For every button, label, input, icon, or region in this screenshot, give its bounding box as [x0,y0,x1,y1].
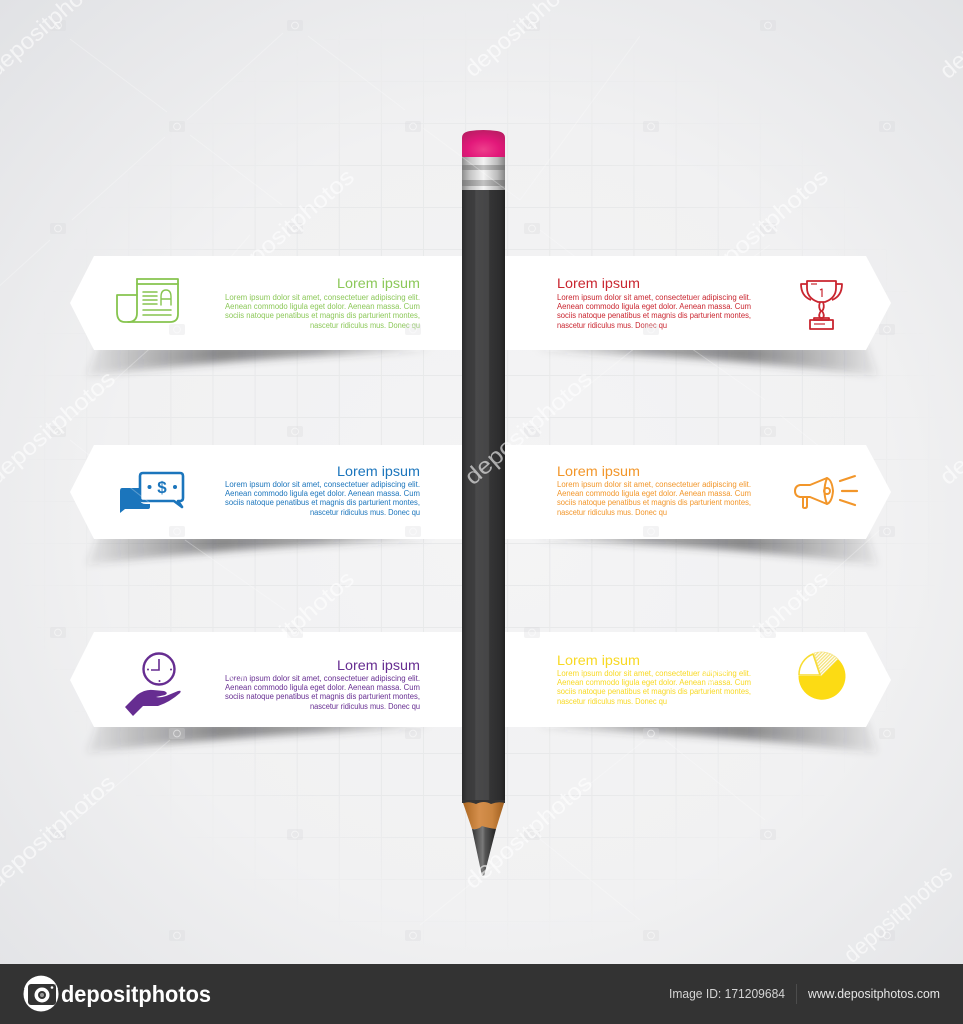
eraser [462,130,505,158]
text block: nascetur ridiculus mus. Donec qu [310,702,420,711]
icon: trophy [801,281,842,329]
watermark text: depositphotos [459,365,597,490]
heading: Lorem ipsum [337,658,420,673]
footer bar [0,964,963,1024]
text block: sociis natoque penatibus et magnis dis parturient montes, [225,498,420,507]
text block: nascetur ridiculus mus. Donec qu [557,697,667,706]
text block [557,293,751,330]
text block: Lorem ipsum dolor sit amet, consectetuer adipiscing elit. [225,674,420,683]
heading: Lorem ipsum [557,653,640,668]
panel: bottom right banner [505,632,891,727]
pencil [462,130,505,876]
panel: middle right banner [505,445,891,539]
watermark text: depositphotos [695,565,833,690]
watermark network lines [0,33,880,925]
text block [225,674,420,711]
text block: Aenean commodo ligula eget dolor. Aenean massa. Cum [557,678,751,687]
text block: nascetur ridiculus mus. Donec qu [310,321,420,330]
panel: top left banner [70,256,462,350]
icon: newspaper document [117,279,178,322]
metal ferrule [462,157,505,190]
text block: Aenean commodo ligula eget dolor. Aenean massa. Cum [557,489,751,498]
heading: Lorem ipsum [337,464,420,479]
watermark cameras [50,20,895,941]
panel: top right banner [505,256,891,350]
watermark text: depositphotos [695,163,833,288]
text block: Lorem ipsum dolor sit amet, consectetuer adipiscing elit. [225,293,420,302]
watermark text: depositphotos [221,163,359,288]
text block: Lorem ipsum dolor sit amet, consectetuer adipiscing elit. [557,480,751,489]
logo wordmark: depositphotos [61,981,211,1007]
text block [225,480,420,517]
image id: Image ID: 171209684 [669,987,785,1001]
panel: middle left banner [70,445,462,539]
text block [225,293,420,330]
wood cone [462,800,505,829]
graphite tip [472,826,496,876]
icon: pie chart [798,652,845,700]
text block: sociis natoque penatibus et magnis dis parturient montes, [225,692,420,701]
text block: sociis natoque penatibus et magnis dis parturient montes, [557,687,751,696]
text block: nascetur ridiculus mus. Donec qu [557,508,667,517]
text block: Aenean commodo ligula eget dolor. Aenean massa. Cum [225,683,420,692]
text block [557,480,751,517]
heading: Lorem ipsum [337,276,420,291]
logo camera mark [24,976,58,1012]
panel: bottom left banner [70,632,462,727]
text block: Lorem ipsum dolor sit amet, consectetuer adipiscing elit. [557,293,751,302]
watermark text: depositphotos [221,565,359,690]
heading: Lorem ipsum [557,276,640,291]
text block: sociis natoque penatibus et magnis dis parturient montes, [557,311,751,320]
watermark text: depositphotos [838,860,957,968]
text block: sociis natoque penatibus et magnis dis parturient montes, [225,311,420,320]
text block: Lorem ipsum dolor sit amet, consectetuer adipiscing elit. [225,480,420,489]
text block: Aenean commodo ligula eget dolor. Aenean massa. Cum [225,489,420,498]
scalloped body edge [462,800,505,804]
text block: nascetur ridiculus mus. Donec qu [557,321,667,330]
icon: money chat bubbles [120,473,183,513]
icon: money chat bubbles: $ [157,478,167,497]
text block: sociis natoque penatibus et magnis dis parturient montes, [557,498,751,507]
banner shadows [86,344,878,753]
icon: megaphone [795,476,857,508]
website url: www.depositphotos.com [807,987,940,1001]
icon: clock over hand [125,654,181,716]
watermark text: depositphotos [459,769,597,894]
heading: Lorem ipsum [557,464,640,479]
text block: Aenean commodo ligula eget dolor. Aenean massa. Cum [225,302,420,311]
text block: Lorem ipsum dolor sit amet, consectetuer adipiscing elit. [557,669,751,678]
text block [557,669,751,706]
pencil body [462,190,505,803]
text block: Aenean commodo ligula eget dolor. Aenean massa. Cum [557,302,751,311]
text block: nascetur ridiculus mus. Donec qu [310,508,420,517]
